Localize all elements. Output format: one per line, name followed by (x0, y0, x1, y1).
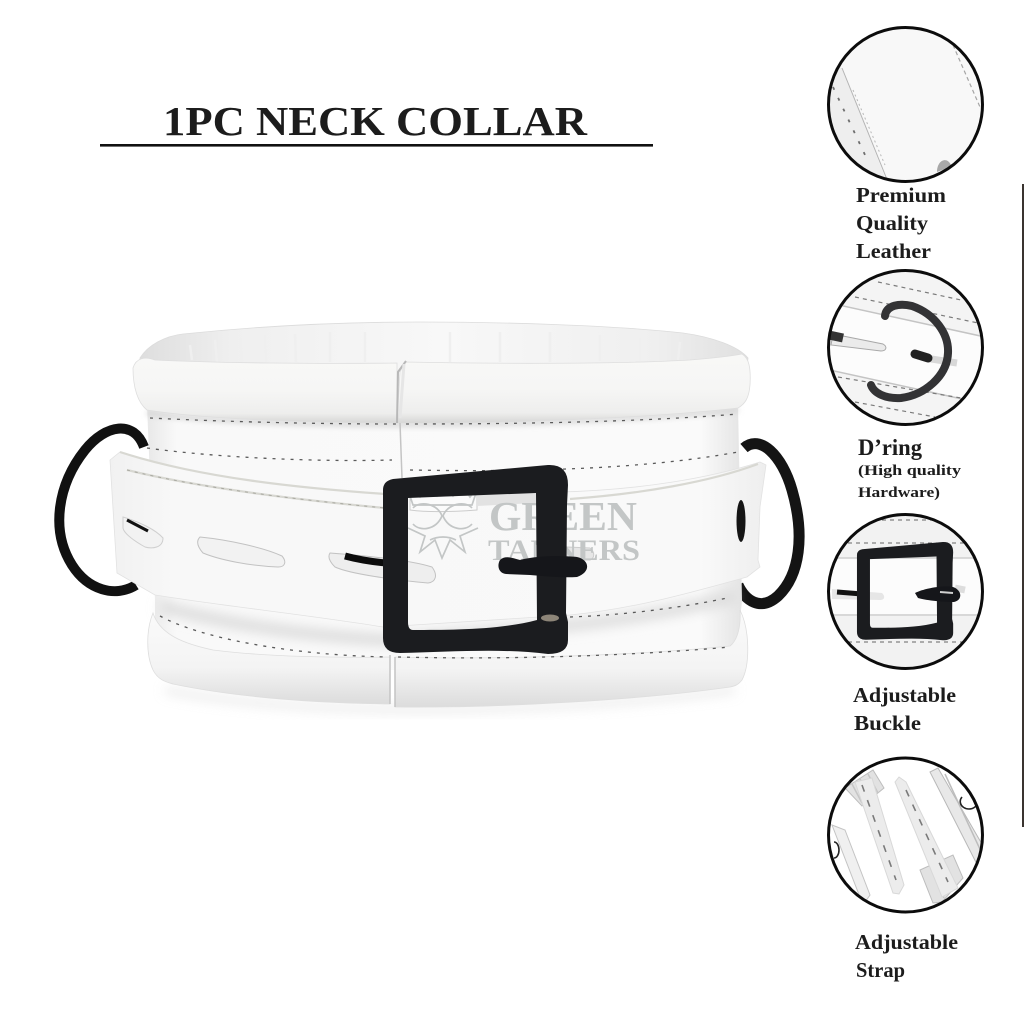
title: 1PC NECK COLLAR (163, 98, 587, 144)
strap adjustment slots (123, 491, 594, 583)
lower padded rim (148, 610, 748, 707)
title underline (100, 144, 653, 147)
circle 1 outline (828, 28, 982, 182)
label: premium quality leather (856, 183, 947, 263)
buckle frame (383, 465, 568, 654)
label: premium quality leather: Quality (856, 211, 929, 235)
label: D'ring high quality hardware: Hardware) (858, 485, 940, 501)
collar main body (147, 405, 742, 670)
badge: premium quality leather (825, 27, 984, 263)
stitching (147, 414, 738, 658)
strap eyelet (736, 500, 746, 542)
lower body shadow (160, 596, 735, 640)
watermark (407, 482, 640, 567)
label: D'ring high quality hardware: D’ring (858, 435, 922, 460)
circle 4 strap close-up (831, 768, 981, 904)
label: D'ring high quality hardware (858, 435, 962, 501)
watermark lion emblem (407, 485, 478, 558)
badge: adjustable buckle (828, 514, 984, 735)
right D-ring (738, 444, 799, 604)
label: premium quality leather: Premium (856, 183, 947, 207)
circle 3 buckle frame (857, 542, 953, 640)
label: premium quality leather: Leather (856, 239, 931, 263)
circle 1 leather close-up (830, 46, 980, 178)
label: adjustable strap: Strap (856, 958, 905, 982)
circle 2 D-ring close-up (825, 270, 985, 426)
label: D'ring high quality hardware: (High quality (858, 463, 962, 479)
badge: D-ring (825, 270, 985, 501)
collar photo (59, 322, 799, 710)
buckle (383, 465, 587, 654)
strap (110, 452, 766, 627)
circle 3 outline (828, 514, 982, 668)
circle 2 outline (828, 270, 982, 424)
watermark: THE (490, 482, 523, 496)
circle 3 buckle tongue (915, 586, 960, 602)
centre seam (390, 423, 402, 707)
label: adjustable buckle: Adjustable (853, 683, 956, 707)
label: adjustable buckle: Buckle (854, 711, 921, 735)
left D-ring (59, 429, 144, 591)
label: adjustable buckle (853, 683, 956, 735)
collar inner lining (140, 322, 748, 385)
buckle tongue (498, 556, 587, 577)
circle 4 outline (828, 758, 982, 912)
buckle roller highlight (541, 614, 559, 622)
label: adjustable strap: Adjustable (855, 930, 958, 954)
watermark: TANNERS (488, 534, 640, 567)
upper rim (133, 354, 750, 423)
circle 3 buckle close-up (828, 514, 984, 670)
label: adjustable strap (855, 930, 958, 982)
watermark: GREEN (489, 493, 637, 539)
badge: adjustable strap (828, 757, 990, 982)
